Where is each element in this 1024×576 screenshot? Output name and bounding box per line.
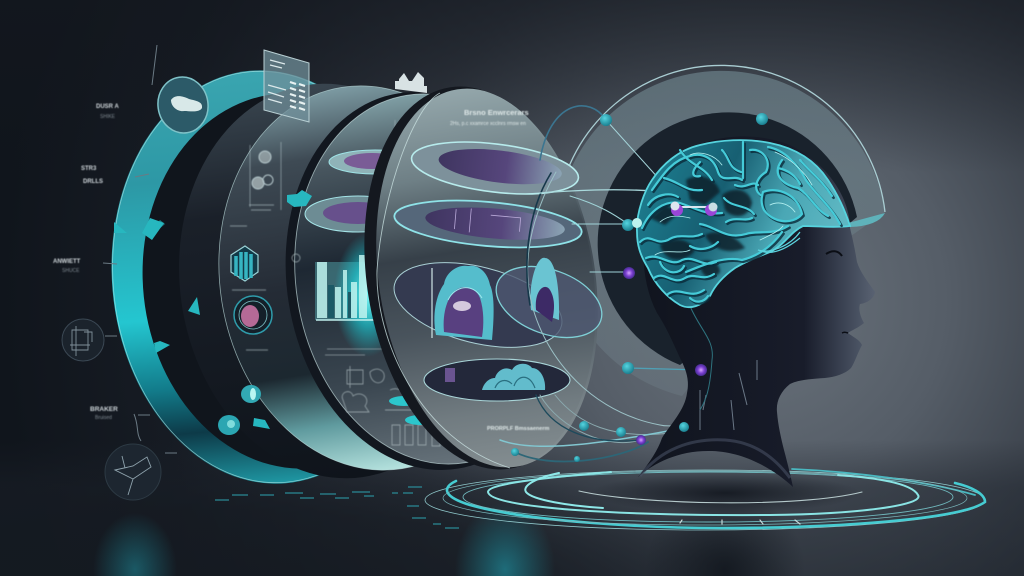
callout leader lines [103,45,177,453]
floating data panel [264,50,309,122]
disc 4 upper lens [329,150,421,174]
left label 1: DUSR A [96,104,119,110]
disc 4 rim [259,71,597,491]
network nodes: teal [511,113,768,462]
glowing node [632,218,642,228]
dome around head [557,65,885,396]
disc 3: glass panel [192,64,552,492]
lens 2: second [392,194,584,254]
left label 2 [81,166,103,185]
lens 3b: overlapping brain section [486,253,612,351]
glowing disc nodes [218,385,261,435]
network nodes: purple [623,267,707,445]
bar chart [315,233,402,357]
head shadow on floor [590,473,860,513]
small building icon atop disc [395,72,427,93]
disc 1: teal ring [95,57,466,497]
disc 5: front glass panel [350,72,624,484]
disc 5 caption: PRORPLF Bmssaenerm [487,426,549,432]
brain [637,140,850,307]
left label 2: DRLLS [83,179,103,185]
floor data dashes [215,487,459,528]
left label 1: SHIKE [100,114,116,120]
disc 4: glass panel with chart [269,73,603,485]
left label 3: ANWIETT [53,259,81,265]
outline sketches on disc 4 [292,110,440,446]
lens 3: brain cross-section [385,247,571,363]
hexagon bars icon [231,246,258,281]
head profile [638,136,875,487]
lens 1: top [409,134,581,202]
disc 5 heading text: Brsno Enwrcerars [464,108,529,117]
brain nodes [670,202,718,216]
glass badge with brain glyph [154,74,212,136]
left circle icon: network [105,444,161,500]
left label 4: BRAKER [90,406,118,413]
left label 3 [53,259,81,274]
disc 5 heading text: 2Hs, p.c xxamrce xcclnrs rmsw en [450,121,526,127]
disc 5 rim [338,70,622,486]
face features [826,251,848,333]
brain gyri body [640,142,840,302]
left label 4: Bruised [95,415,112,421]
left label 1 [96,104,119,120]
disc 5 heading text [450,108,529,127]
brain gyri shadow [642,144,842,303]
icons on disc 3 [230,142,281,350]
neck highlights [640,306,790,478]
left label 2: STR3 [81,166,97,172]
brain highlights [655,152,812,255]
disc 2: dark [154,63,516,499]
small cyan tiles [385,150,435,425]
floor rings [425,469,985,530]
left circle icon: device [62,319,104,361]
round pink icon [234,296,272,334]
left label 4 [90,406,118,421]
disc 4 middle lens [305,196,411,232]
lens 4: cloud brain [424,359,570,401]
connector lines [500,106,760,461]
teal shards [114,190,312,429]
dark brain furrows [650,176,752,277]
left label 3: SHUCE [62,268,80,274]
